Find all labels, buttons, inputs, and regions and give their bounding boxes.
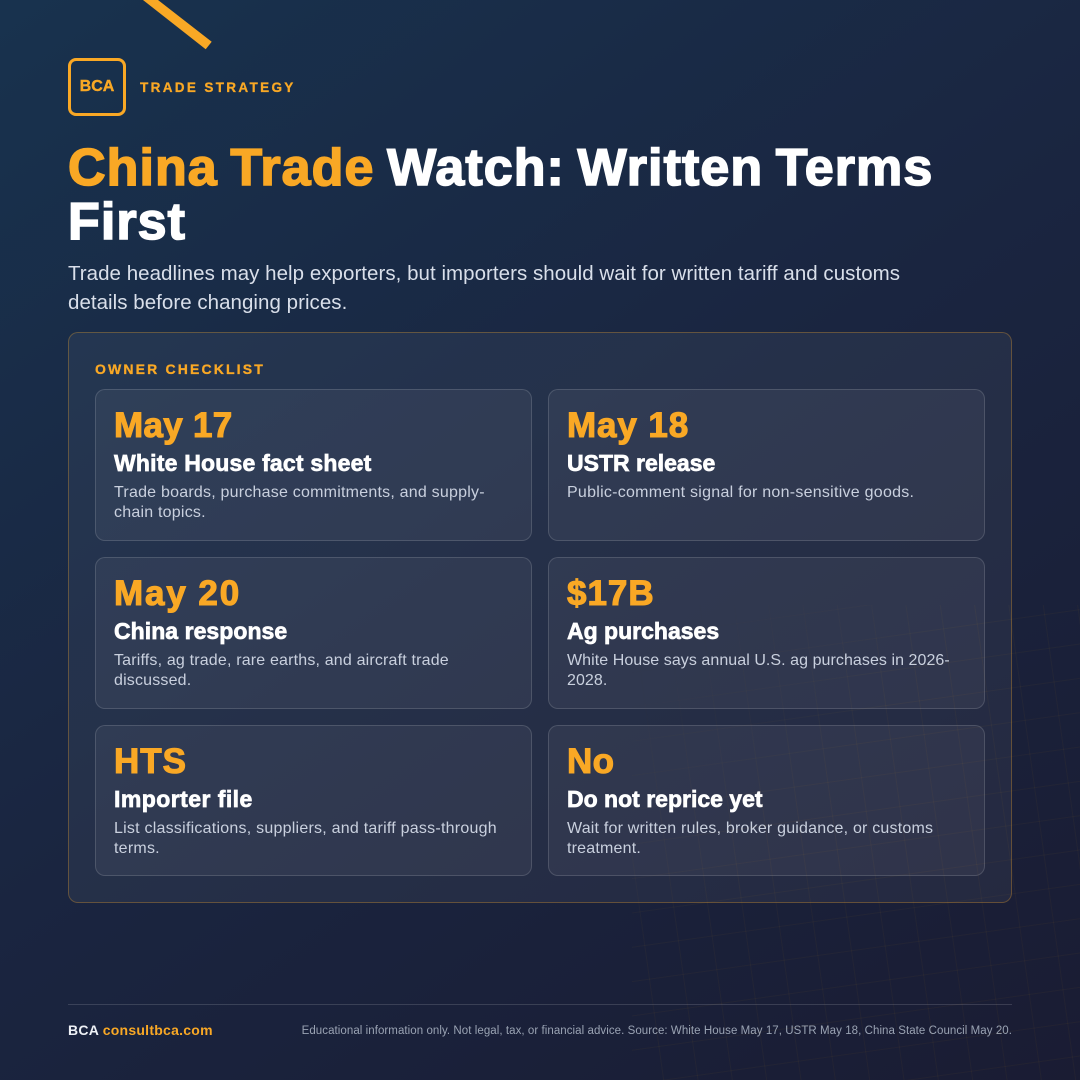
footer disclaimer: Educational information only. Not legal, tax, or financial advice. Source: White House May 17, USTR May 18, China State Council May 20.	[302, 1025, 1012, 1037]
card: No: No	[567, 742, 614, 781]
subtitle	[68, 262, 900, 314]
card: HTS: Importer file	[114, 786, 253, 812]
card: May 17: White House fact sheet	[114, 450, 371, 476]
card: HTS	[95, 725, 532, 876]
title	[68, 139, 933, 251]
title: China Trade Watch: Written Terms	[68, 139, 933, 197]
footer rule	[68, 1004, 1012, 1005]
panel: owner checklist	[68, 332, 1012, 903]
card: May 17: May 17	[114, 406, 233, 445]
panel heading: OWNER CHECKLIST	[95, 361, 265, 377]
card: $17B: White House says annual U.S. ag purchases in 2026-	[567, 652, 950, 669]
card: May 18	[548, 389, 985, 541]
logo: BCA badge: BCA	[80, 78, 114, 95]
card: May 17	[95, 389, 532, 541]
card: May 20: May 20	[114, 574, 241, 613]
card: May 20: discussed.	[114, 672, 191, 688]
footer brand: BCA consultbca.com	[68, 1022, 213, 1038]
card: May 20	[95, 557, 532, 709]
card: $17B: 2028.	[567, 672, 607, 688]
card: $17B: Ag purchases	[567, 618, 719, 644]
icon: amber diagonal accent	[143, 0, 212, 50]
subtitle: Trade headlines may help exporters, but importers should wait for written tariff and customs	[68, 262, 900, 285]
card: May 17: Trade boards, purchase commitments, and supply-	[114, 484, 485, 501]
card: May 20: Tariffs, ag trade, rare earths, and aircraft trade	[114, 652, 449, 669]
card: HTS: HTS	[114, 742, 187, 781]
card: HTS: terms.	[114, 840, 160, 856]
card: May 17: chain topics.	[114, 504, 206, 520]
card: $17B: $17B	[567, 574, 655, 613]
logo: BCA badge	[68, 58, 126, 116]
card: No: treatment.	[567, 840, 641, 856]
card: May 18: Public-comment signal for non-sensitive goods.	[567, 484, 914, 501]
title: First	[68, 193, 186, 251]
subtitle: details before changing prices.	[68, 291, 347, 314]
card: No: Do not reprice yet	[567, 786, 763, 812]
card: No	[548, 725, 985, 876]
card: No: Wait for written rules, broker guidance, or customs	[567, 820, 933, 837]
card: $17B	[548, 557, 985, 709]
card: May 18: May 18	[567, 406, 689, 445]
eyebrow: trade strategy: TRADE STRATEGY	[140, 80, 296, 95]
card: HTS: List classifications, suppliers, and tariff pass-through	[114, 820, 497, 837]
card: May 18: USTR release	[567, 450, 715, 476]
card: May 20: China response	[114, 618, 287, 644]
